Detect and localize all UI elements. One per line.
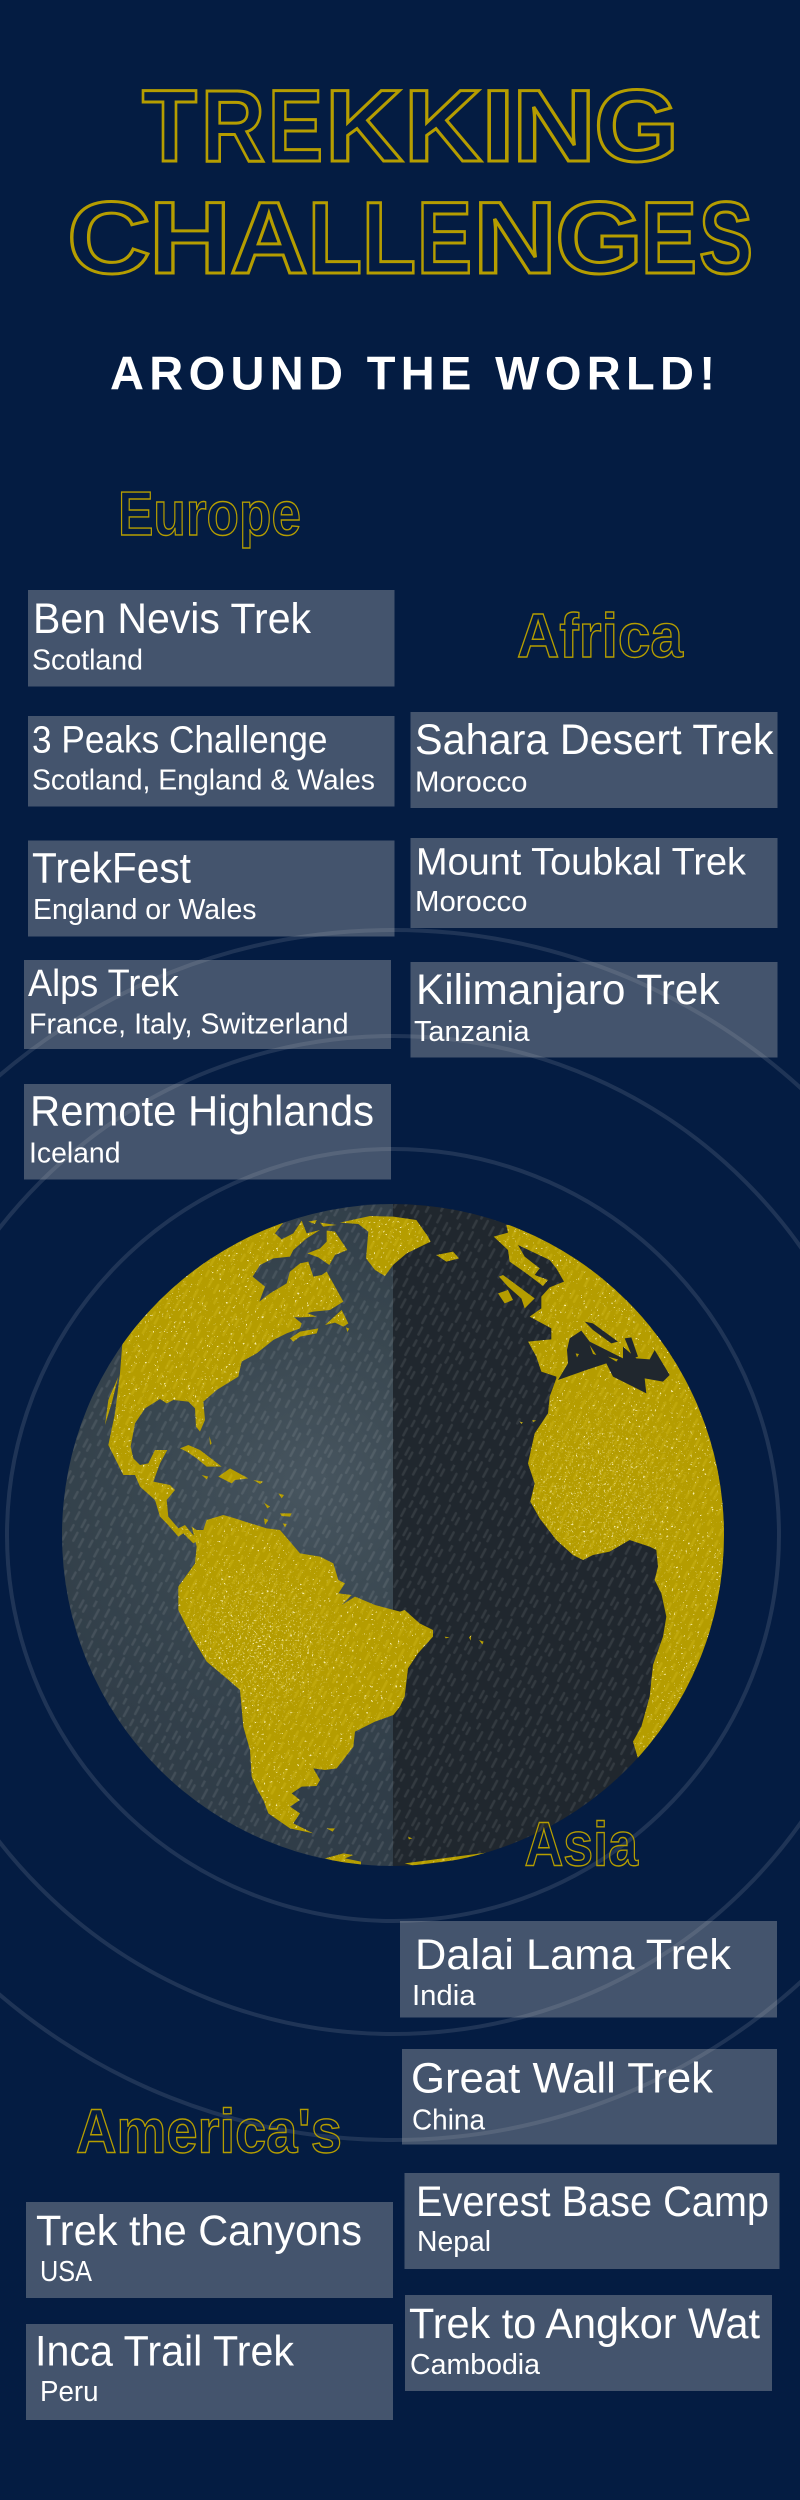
title: Trekking Challenges: C bbox=[67, 181, 151, 295]
card: Everest Base Camp: Nepal bbox=[417, 2226, 491, 2258]
title: Trekking Challenges: N bbox=[512, 69, 596, 183]
card: Alps Trek: Alps Trek bbox=[28, 963, 179, 1005]
land: Europe and Africa bbox=[494, 1225, 724, 1758]
land: North and Central America bbox=[105, 1220, 349, 1543]
card: Trek the Canyons bbox=[26, 2202, 393, 2298]
title: Trekking Challenges: G bbox=[555, 181, 643, 295]
heading: America's: America's bbox=[76, 2098, 342, 2166]
card: Inca Trail Trek bbox=[26, 2324, 393, 2420]
card: Great Wall Trek: China bbox=[412, 2104, 486, 2136]
card: Sahara Desert Trek bbox=[410, 712, 778, 808]
subtitle: AROUND THE WORLD! bbox=[110, 346, 715, 400]
card: Kilimanjaro Trek: Tanzania bbox=[414, 1016, 530, 1048]
title: Trekking Challenges: E bbox=[417, 181, 472, 295]
card: Alps Trek bbox=[24, 960, 391, 1049]
title: Trekking Challenges: T bbox=[142, 69, 197, 183]
card: Kilimanjaro Trek: Kilimanjaro Trek bbox=[416, 966, 720, 1014]
title: Trekking Challenges: E bbox=[641, 181, 697, 295]
title: Trekking Challenges: K bbox=[325, 69, 403, 183]
title: Trekking Challenges: E bbox=[268, 69, 323, 183]
card: Trek the Canyons: USA bbox=[40, 2256, 93, 2288]
card: Alps Trek: France, Italy, Switzerland bbox=[29, 1008, 348, 1040]
title: Trekking Challenges: R bbox=[201, 69, 265, 183]
card: Inca Trail Trek: Peru bbox=[40, 2376, 98, 2408]
card: Dalai Lama Trek: Dalai Lama Trek bbox=[415, 1931, 731, 1979]
card: 3 Peaks Challenge: 3 Peaks Challenge bbox=[32, 720, 328, 762]
card: Great Wall Trek: Great Wall Trek bbox=[411, 2054, 714, 2102]
card: Ben Nevis Trek bbox=[28, 590, 394, 686]
card: 3 Peaks Challenge bbox=[28, 716, 394, 806]
title: Trekking Challenges: H bbox=[149, 181, 231, 295]
card: Mount Toubkal Trek: Morocco bbox=[415, 886, 528, 918]
card: Trek to Angkor Wat bbox=[405, 2295, 772, 2391]
title: Trekking Challenges: I bbox=[481, 69, 515, 183]
card: Dalai Lama Trek: India bbox=[412, 1980, 476, 2012]
card: TrekFest: England or Wales bbox=[33, 894, 256, 926]
card: Mount Toubkal Trek: Mount Toubkal Trek bbox=[416, 842, 747, 884]
title: Trekking Challenges: A bbox=[230, 181, 308, 295]
land: Greenland bbox=[340, 1216, 431, 1276]
title: Trekking Challenges bbox=[67, 69, 753, 295]
card: Remote Highlands: Iceland bbox=[29, 1138, 120, 1170]
land: South America bbox=[178, 1515, 433, 1866]
card: Sahara Desert Trek: Sahara Desert Trek bbox=[415, 716, 774, 764]
card: TrekFest: TrekFest bbox=[32, 844, 191, 892]
card: Great Wall Trek bbox=[402, 2049, 777, 2144]
title: Trekking Challenges: K bbox=[404, 69, 482, 183]
card: Trek to Angkor Wat: Cambodia bbox=[410, 2349, 541, 2381]
card: Sahara Desert Trek: Morocco bbox=[415, 766, 528, 798]
land: Iceland, islands and Antarctica bbox=[405, 1252, 536, 1865]
card: Ben Nevis Trek: Scotland bbox=[32, 644, 143, 676]
title: Trekking Challenges: L bbox=[362, 181, 416, 295]
card: Trek to Angkor Wat: Trek to Angkor Wat bbox=[409, 2300, 760, 2348]
card: Dalai Lama Trek bbox=[400, 1921, 777, 2018]
globe illustration bbox=[62, 1204, 724, 1866]
sea: Mediterranean, Adriatic and Black Sea bbox=[558, 1322, 670, 1393]
card: Remote Highlands bbox=[24, 1084, 391, 1180]
card: Inca Trail Trek: Inca Trail Trek bbox=[35, 2328, 294, 2376]
card: TrekFest bbox=[28, 840, 394, 936]
card: Everest Base Camp: Everest Base Camp bbox=[416, 2178, 769, 2226]
heading: Europe: Europe bbox=[118, 480, 301, 549]
card: 3 Peaks Challenge: Scotland, England & Wales bbox=[32, 764, 375, 796]
concentric rings behind the globe bbox=[0, 930, 800, 2140]
card: Everest Base Camp bbox=[404, 2173, 780, 2269]
title: Trekking Challenges: L bbox=[308, 181, 362, 295]
card: Remote Highlands: Remote Highlands bbox=[30, 1088, 374, 1136]
heading: Asia: Asia bbox=[524, 1810, 638, 1880]
card: Trek the Canyons: Trek the Canyons bbox=[36, 2207, 362, 2255]
card: Mount Toubkal Trek bbox=[410, 838, 778, 928]
land: British Isles and Mediterranean islands bbox=[498, 1275, 618, 1362]
title: Trekking Challenges: N bbox=[473, 181, 557, 295]
card: Kilimanjaro Trek bbox=[410, 962, 778, 1058]
title: Trekking Challenges: G bbox=[594, 69, 679, 183]
heading: Africa: Africa bbox=[517, 602, 683, 671]
card: Ben Nevis Trek: Ben Nevis Trek bbox=[33, 595, 311, 643]
title: Trekking Challenges: S bbox=[699, 181, 753, 295]
